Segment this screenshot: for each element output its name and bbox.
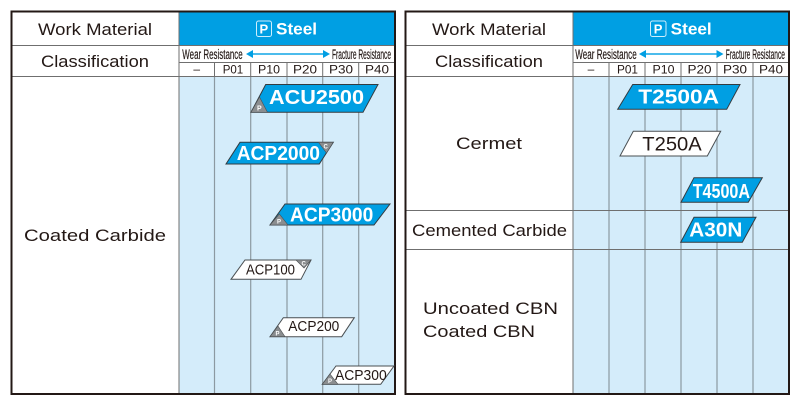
grade: ACU2500: P [257, 106, 262, 112]
column labels: P10 [258, 62, 280, 76]
column labels: – [193, 62, 200, 76]
icon: P badge [256, 21, 272, 36]
column labels: P30 [723, 62, 747, 76]
column labels: P20 [688, 62, 712, 76]
panel: left table [12, 12, 395, 394]
grade: ACP3000: ACP3000 [290, 204, 373, 226]
grade: ACP300 [322, 366, 394, 385]
row label: coated carbide: Coated Carbide [24, 226, 166, 245]
column labels: P01 [617, 62, 638, 76]
grade: T250A: T250A [642, 135, 702, 156]
column labels [588, 62, 783, 76]
label: wear resistance: Wear Resistance [575, 47, 637, 62]
icon: P badge [650, 21, 666, 36]
grade: ACP100: C [302, 262, 306, 268]
icon: P badge: P [260, 22, 268, 36]
column labels: P40 [759, 62, 783, 76]
heading: steel: Steel [276, 19, 317, 38]
column labels: P01 [223, 62, 244, 76]
heading: work material: Work Material [432, 20, 546, 39]
grade: ACP200: P [276, 332, 280, 338]
grade: ACP2000: ACP2000 [237, 143, 320, 165]
grade: ACP100: ACP100 [246, 261, 295, 278]
panel: right table [406, 12, 789, 394]
grade: T2500A: T2500A [638, 86, 719, 108]
row label: uncoated and coated CBN: Coated CBN [423, 322, 535, 341]
grade: ACP300: P [328, 379, 332, 385]
column labels: – [588, 62, 595, 76]
row label: cemented carbide: Cemented Carbide [412, 221, 567, 240]
label: wear resistance: Wear Resistance [182, 47, 243, 62]
column labels: P10 [652, 62, 675, 76]
grade: T4500A: T4500A [693, 181, 750, 203]
heading: classification: Classification [435, 52, 543, 71]
row label: cermet: Cermet [456, 134, 522, 153]
grade: ACU2500: ACU2500 [269, 86, 364, 109]
arrow: wear to fracture [246, 50, 330, 58]
arrow: wear to fracture [639, 50, 724, 58]
grade: A30N: A30N [689, 219, 742, 242]
heading: steel: Steel [671, 19, 712, 38]
column labels: P40 [365, 62, 389, 76]
column labels [193, 62, 389, 76]
icon: P badge: P [654, 22, 663, 36]
grade: ACU2500 [251, 84, 378, 112]
heading: work material: Work Material [38, 20, 152, 39]
column labels: P30 [329, 62, 353, 76]
grade: ACP3000: P [277, 220, 281, 226]
panel: left table: Fracture Resistance [332, 47, 391, 62]
grade: ACP300: ACP300 [335, 367, 387, 384]
grade: ACP200: ACP200 [288, 318, 339, 335]
heading: classification: Classification [41, 52, 149, 71]
column labels: P20 [293, 62, 317, 76]
grade: ACP200 [270, 318, 354, 338]
grade: T250A [620, 131, 721, 156]
grade: A30N [681, 217, 756, 242]
row label: uncoated and coated CBN [423, 299, 558, 341]
grade: ACP100 [231, 260, 311, 279]
row label: uncoated and coated CBN: Uncoated CBN [423, 299, 558, 318]
grade: T2500A [618, 84, 740, 109]
grade: ACP2000: C [324, 144, 328, 150]
